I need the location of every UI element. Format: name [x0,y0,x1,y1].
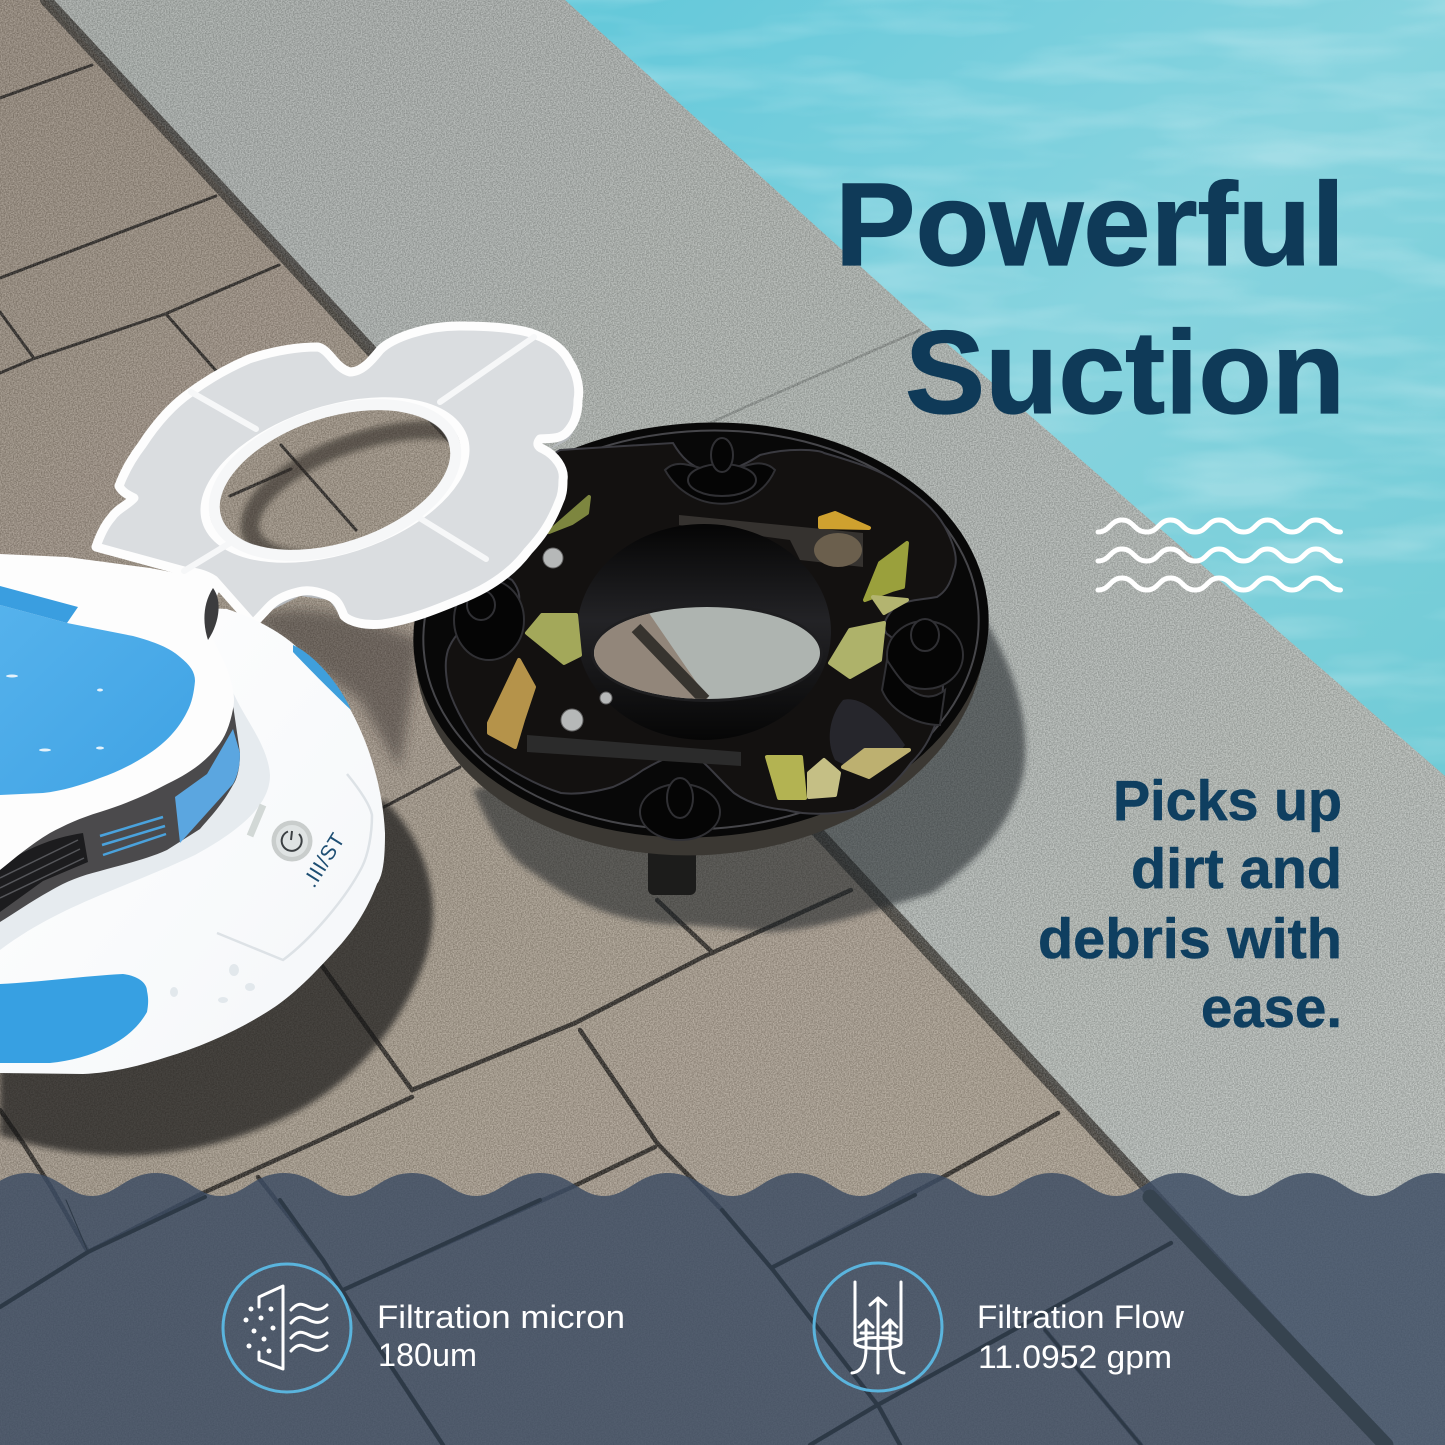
filter lid [96,326,579,628]
filtration micron text: 180um [378,1337,477,1373]
brand mark: .III/ST [299,829,350,892]
subheading: dirt and [1131,837,1342,901]
title [835,159,1345,439]
metal frame with debris [679,515,863,567]
robot body shell [0,600,385,1074]
robot blue side panel [175,729,240,843]
robot blue top cover [0,605,195,795]
tray rim [399,403,1003,857]
icon: waves [1098,520,1340,590]
icon: upward flow through filter [814,1263,942,1391]
robot blue edge strip [293,645,351,710]
subheading [1038,769,1342,1040]
robot vent grille [0,833,88,912]
pool water [560,0,1445,780]
cylinder inner ring [591,604,823,702]
filter ribs [184,337,534,571]
subheading: Picks up [1113,769,1342,833]
robot indicator slot [250,805,263,836]
filtration flow text: 11.0952 gpm [978,1339,1172,1375]
shadows of robot and tray [0,610,1025,1155]
icon: filter with particles [223,1264,351,1392]
tray rim edge line [410,412,992,848]
tray glossy floor reflection [830,699,905,767]
robot vacuum [0,554,385,1074]
tray inner floor [446,443,956,814]
title: Suction [905,307,1345,439]
filtration flow text: Filtration Flow [977,1299,1185,1335]
title: Powerful [835,159,1345,291]
water droplets [6,674,104,752]
subheading: ease. [1201,976,1342,1040]
tray wheel posts [454,438,963,840]
leaves [489,497,909,798]
joints visible through wave band [0,1195,1386,1445]
filtration micron text: Filtration micron [377,1299,625,1335]
robot lid gap [204,588,219,640]
robot dark side wall [0,705,240,922]
robot blue stripes [100,817,166,855]
central cylinder [577,524,831,740]
subheading: debris with [1038,907,1342,971]
lower hinge bar [527,735,741,766]
tray wheel foot [648,845,696,895]
spec: filtration flow [814,1263,1185,1391]
view through filter hole [238,417,450,550]
filter mesh panel [96,326,579,625]
dark wave band [0,1173,1445,1445]
robot blue grip [0,974,148,1063]
filter centre collar [195,377,475,583]
spec: filtration micron [223,1264,625,1392]
robot panel line [217,774,372,960]
robot white lid [0,554,234,870]
debris tray [399,403,1003,895]
robot blue latch tab [0,586,78,623]
filtration micron text [377,1299,625,1373]
filtration flow text [977,1299,1185,1375]
filter thickness [240,400,579,628]
robot side contour [0,690,270,950]
tray outer bowl [401,412,999,874]
tray screws [543,548,612,731]
ground seen through cylinder [594,607,820,699]
power button [272,820,312,862]
